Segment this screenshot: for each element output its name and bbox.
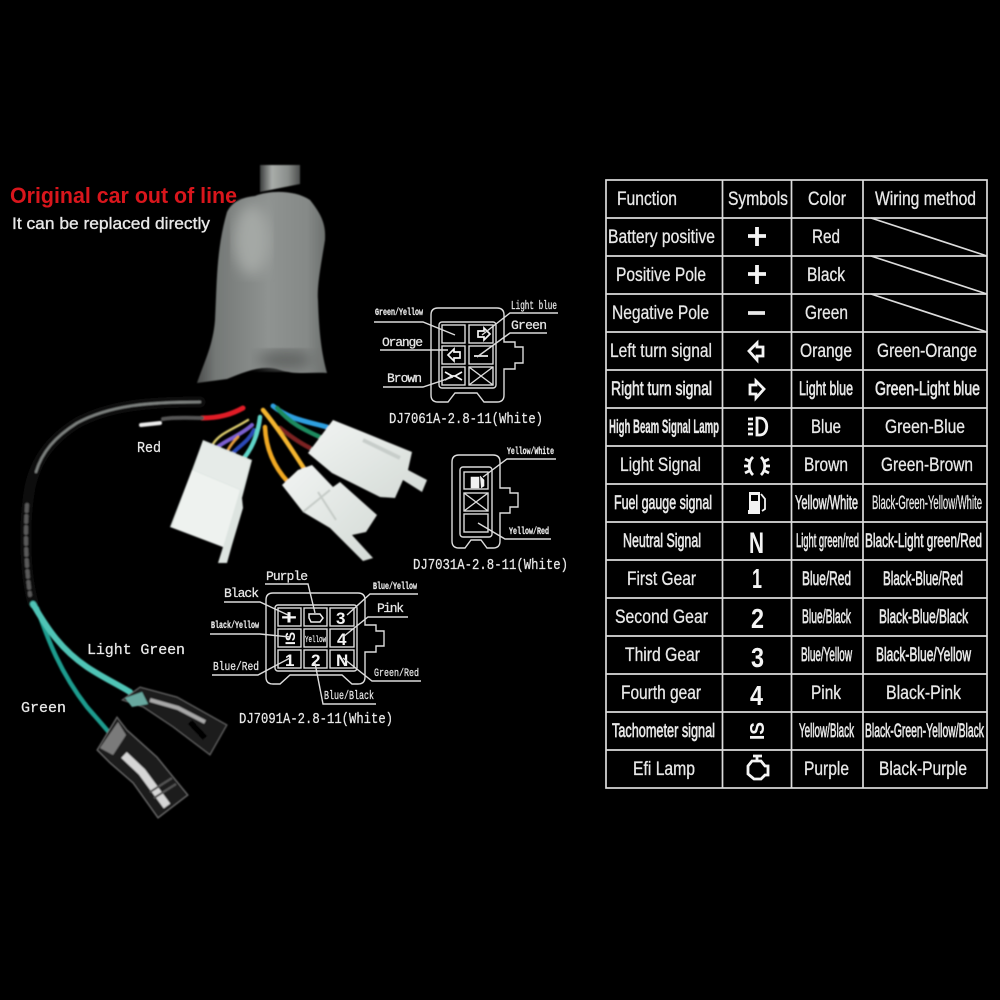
leader lines [478,459,556,539]
row: high beam signal lamp: Blue [811,417,841,438]
row: third gear [625,642,971,673]
row: fourth gear: Pink [811,683,841,704]
row: second gear: 2 [751,603,764,634]
pin labels: Pink [377,601,404,616]
row: fuel gauge signal [614,492,982,514]
pin symbols: 1 [285,651,294,670]
row: second gear: Blue/Black [802,607,851,628]
row: positive pole: Positive Pole [616,265,706,286]
row: right turn signal [611,379,980,400]
row: neutral signal [623,527,982,560]
pin labels: Light blue [511,299,557,313]
row: tachometer signal: Tachometer signal [612,721,715,742]
photo: wire harness [26,165,427,818]
header row: Color [808,189,847,210]
connector diagram: DJ7061A [374,299,558,428]
leader lines [210,584,421,704]
row: positive pole [616,265,845,286]
title: Original car out of line [10,183,237,208]
row: negative pole [612,303,848,324]
row: right turn signal: Light blue [799,379,853,400]
part number: DJ7091A-2.8-11(White) [239,711,393,728]
row: efi lamp: Black-Purple [879,759,967,780]
row: fourth gear: Black-Pink [886,683,961,704]
row: fourth gear: Fourth gear [621,683,702,704]
heat shrink sleeve [197,165,327,383]
row: neutral signal: Light green/red [796,531,859,552]
row: left turn signal: Left turn signal [610,341,712,362]
pin label: Yellow/Red: Yellow/Red [509,526,549,538]
connector diagram: DJ7031A [413,446,568,574]
pin labels [211,569,419,703]
row: fourth gear: 4 [750,680,763,711]
row: neutral signal: N [749,527,764,560]
row: left turn signal [610,341,977,362]
pin labels: Black [224,586,259,601]
pin labels: Green [511,318,547,333]
row: light signal: Light Signal [620,455,701,476]
white connector: right [308,420,427,498]
row: left turn signal: Green-Orange [877,341,977,362]
row: efi lamp: Purple [804,759,849,780]
row: third gear: Blue/Yellow [801,645,852,666]
pin labels: Blue/Red [213,660,259,674]
pin symbols: + [281,607,297,629]
pin labels: Blue/Black [324,689,374,703]
terminal: light green [122,687,227,755]
row: first gear [627,563,963,594]
row: right turn signal: Right turn signal [611,379,712,400]
row: neutral signal: Neutral Signal [623,531,701,552]
label: Light Green: Light Green [87,642,185,659]
table grid [606,180,987,788]
wiring table [606,180,987,788]
row: light signal [620,455,973,476]
row: high beam signal lamp: High Beam Signal Lamp [609,417,719,438]
coloured wires [213,406,327,482]
part number: DJ7031A-2.8-11(White) [413,557,568,574]
pin symbols: N [336,651,348,670]
label: Green: Green [21,700,66,717]
row: high beam signal lamp [609,417,965,438]
row: second gear: Second Gear [615,607,709,628]
label: Red: Red [137,440,161,457]
row: fuel gauge signal: Fuel gauge signal [614,493,712,514]
pin labels [375,299,557,386]
pin symbols: 3 [336,609,345,628]
row: high beam signal lamp: Green-Blue [885,417,965,438]
pin symbols: IS [282,632,298,645]
pin labels: Orange [382,335,423,350]
row: efi lamp [633,756,967,780]
pin symbols: Yellow [305,635,326,645]
row: tachometer signal: Yellow/Black [799,721,854,742]
row: first gear: 1 [752,563,762,594]
row: first gear: Blue/Red [802,569,851,590]
connector outline [266,593,384,684]
row: left turn signal: Orange [800,341,852,362]
header row: Symbols [728,189,788,210]
header row: Function [617,189,677,210]
pin symbols: 4 [337,630,347,649]
row: efi lamp: Efi Lamp [633,759,695,780]
green wires [33,604,130,750]
terminal: green [97,717,188,818]
red wire with terminal [141,408,243,425]
pin labels: Brown [387,371,422,386]
row: third gear: 3 [751,642,764,673]
fuel symbol [471,476,484,488]
pin label: Yellow/White: Yellow/White [507,446,554,458]
header row [617,189,976,210]
row: light signal: Green-Brown [881,455,973,476]
row: tachometer signal: IS [747,722,769,740]
connector outline [431,308,523,402]
pin labels: Black/Yellow [211,620,259,632]
pin symbols: 2 [311,651,320,670]
row: light signal: Brown [804,455,848,476]
row: fuel gauge signal: Yellow/White [795,493,858,514]
row: battery positive: Red [812,227,840,248]
pin labels: Blue/Yellow [373,581,417,593]
connector diagram: DJ7091A [210,569,421,728]
row: battery positive [608,227,840,248]
white connector: left [170,440,252,563]
pin symbols [281,607,348,670]
leader lines [374,313,558,387]
part number: DJ7061A-2.8-11(White) [389,411,543,428]
white connector: middle [282,465,377,561]
row: positive pole: Black [807,265,845,286]
row: battery positive: Battery positive [608,227,715,248]
row: fourth gear [621,680,961,711]
pin labels: Purple [266,569,308,584]
header row: Wiring method [875,189,976,210]
pin labels: Green/Yellow [375,307,423,319]
symbols [445,328,490,380]
row: first gear: First Gear [627,569,697,590]
row: third gear: Third Gear [625,645,701,666]
row: negative pole: Negative Pole [612,303,709,324]
subtitle: It can be replaced directly [12,214,211,233]
pin labels: Green/Red [374,668,419,680]
row: tachometer signal [612,721,984,742]
connector outline [452,455,518,548]
row: negative pole: Green [805,303,848,324]
black outer cable [26,402,200,603]
row: second gear [615,603,968,634]
